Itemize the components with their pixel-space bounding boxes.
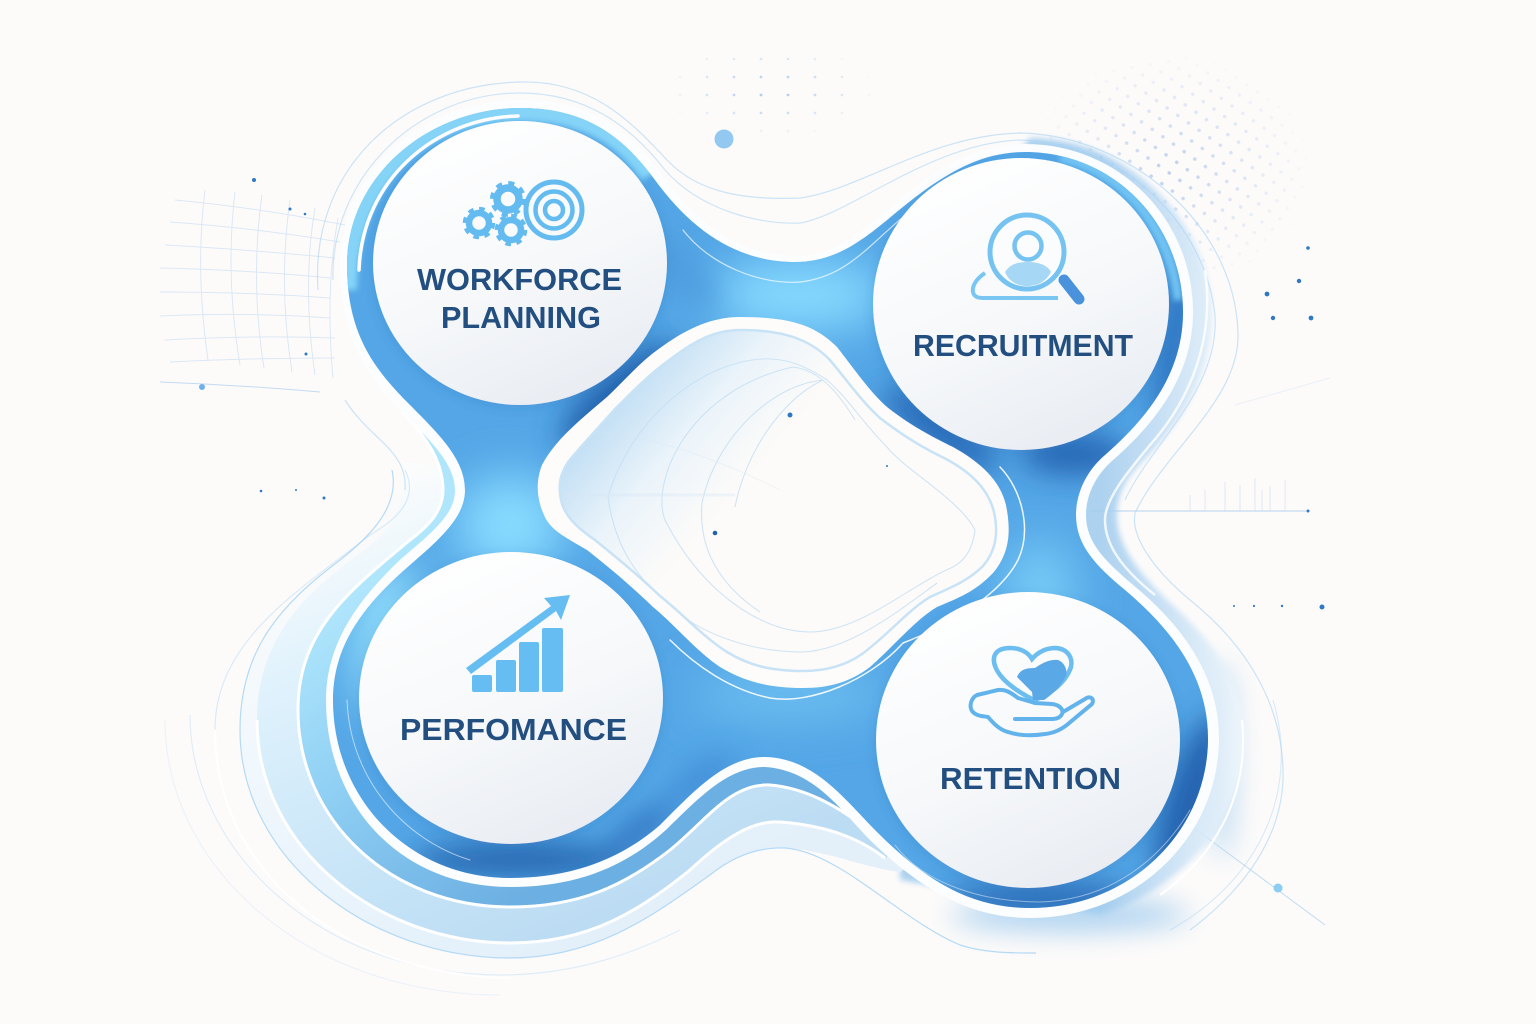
icon: rising bars and arrow (466, 595, 570, 692)
light blue band, lower left (298, 412, 1000, 907)
panel: workforce planning (373, 121, 667, 405)
panel: recruitment (873, 158, 1169, 450)
icon: magnifier and person (973, 215, 1079, 299)
label: RECRUITMENT (913, 328, 1133, 363)
disc (876, 592, 1180, 888)
grid: left (160, 190, 345, 392)
white ribbon (538, 317, 1009, 688)
blob base (333, 108, 1208, 908)
centre cut-out (538, 317, 1009, 688)
panel: retention (876, 592, 1180, 888)
right side pale contour band (900, 138, 1245, 915)
label: PERFOMANCE (400, 712, 627, 747)
accent dot: lower right (1274, 884, 1282, 892)
disc (359, 552, 663, 844)
grid: right (1090, 378, 1330, 925)
faint outer contour, lower left (240, 470, 1000, 958)
thin inner highlight lines (347, 116, 1190, 902)
accent dot: top (714, 130, 734, 148)
dot field: top right (1057, 67, 1293, 268)
disc (373, 121, 667, 405)
label line 2: PLANNING (441, 300, 601, 335)
scattered dots (199, 178, 1324, 610)
flowing thin contour lines (165, 82, 1283, 995)
soft shadow below right discs (950, 660, 1236, 931)
icon: heart in hand (971, 648, 1093, 735)
white ribbon around main shape (326, 100, 1219, 918)
pale contour, lower left (257, 460, 1000, 943)
centre dots (713, 412, 888, 535)
inner pale area (560, 330, 996, 671)
label: WORKFORCE (417, 262, 622, 297)
icon: gears and target (465, 182, 582, 244)
dot field: top centre (678, 58, 869, 132)
panel: performance (359, 552, 663, 844)
disc (873, 158, 1169, 450)
faint inner contours (608, 358, 976, 652)
blob shading (347, 112, 1241, 914)
label: RETENTION (940, 761, 1121, 796)
main blue connected shape (333, 108, 1241, 914)
